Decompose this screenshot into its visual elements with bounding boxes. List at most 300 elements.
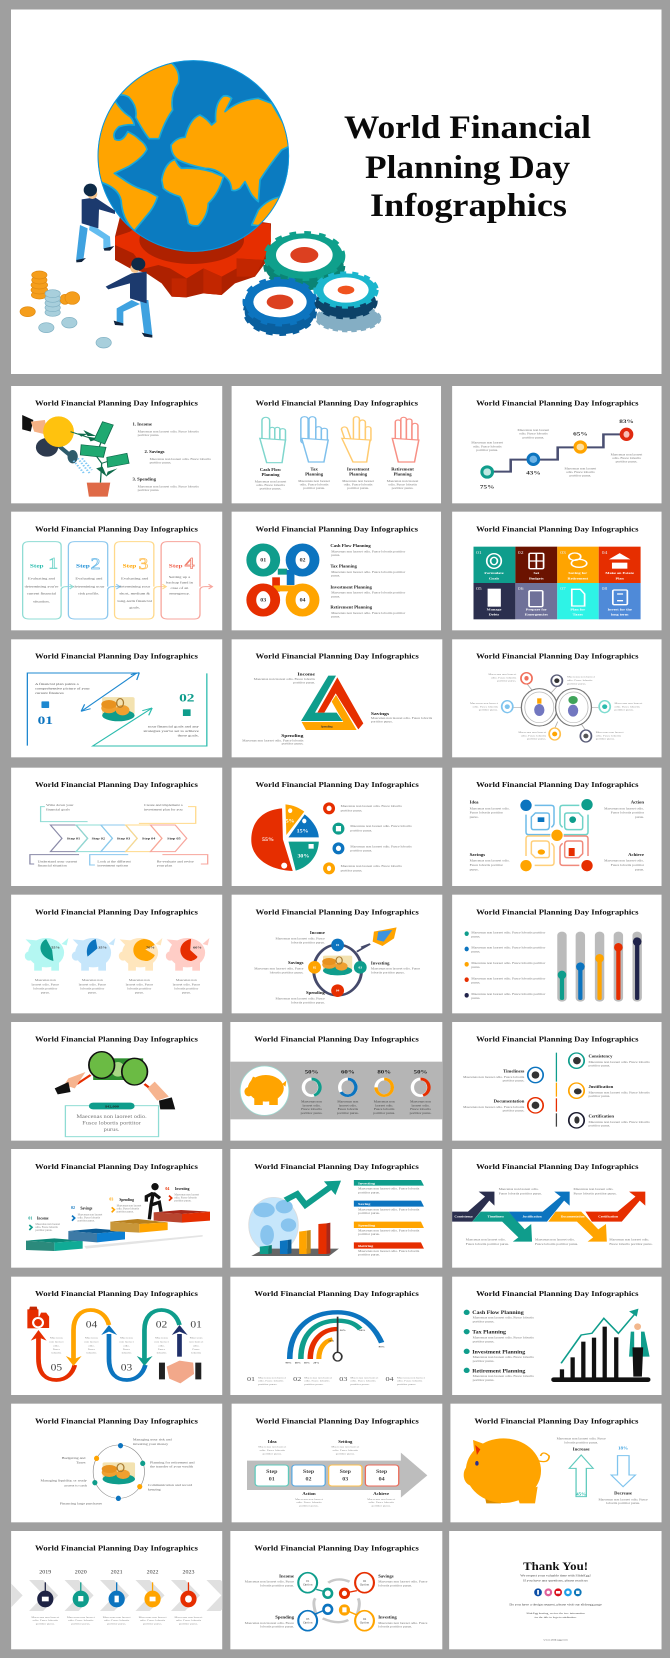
text: step labels: long-term financial bbox=[117, 599, 153, 603]
text: notes: A financial plan paints a bbox=[35, 682, 79, 686]
text: timeline labels: Maecenas non laoreet odio. Fusce lobortis bbox=[588, 1120, 650, 1124]
text: hand labels: Maecenas non laoreet bbox=[298, 479, 330, 483]
text: ring labels: Maecenas non laoreet odio. Fusce bbox=[378, 1580, 428, 1584]
panel: slide 1 watering plant bbox=[11, 386, 222, 503]
diagram: stairs with man and labels: Savings bbox=[80, 1206, 93, 1210]
text: ring notes: Communication and record bbox=[148, 1483, 192, 1487]
text: step labels: Evaluating and bbox=[121, 576, 148, 580]
panel: slide 17 grey band with donuts bbox=[230, 1022, 442, 1141]
text: gauge notes: Maecenas non laoreet bbox=[304, 1376, 332, 1380]
text: hand labels: Cash Flow bbox=[260, 468, 282, 472]
text: curve notes: Maecenas bbox=[50, 1336, 64, 1340]
grid tiles: 01 bbox=[476, 551, 482, 556]
panel: slide 17 grey band with donuts: World Financial Planning Day Infographics bbox=[254, 1035, 419, 1043]
panel: slide 10 chevron steps: World Financial Planning Day Infographics bbox=[35, 780, 198, 789]
text: list: 1. Income bbox=[132, 422, 152, 426]
text: ring notes: Maecenas non laoreet bbox=[596, 730, 624, 734]
text: step labels: Step bbox=[76, 563, 90, 569]
diagram: stairs with man and labels: Maecenas non laoreet bbox=[174, 1192, 199, 1196]
text: chevron labels and notes: Step 04 bbox=[142, 837, 156, 840]
text: increase and decrease: Maecenas non laoreet odio. Fusce bbox=[557, 1437, 606, 1441]
panel: slide 16 magnifying glasses: World Financial Planning Day Infographics bbox=[35, 1035, 198, 1043]
text: piggy notes bbox=[32, 978, 201, 994]
grid tiles: Set bbox=[533, 571, 540, 575]
diagram: curved arrows: 04 bbox=[86, 1321, 97, 1330]
text: arrow notes: Maecenas non laoreet odio. bbox=[499, 1187, 539, 1191]
panel: slide 23 gauge: World Financial Planning Day Infographics bbox=[254, 1289, 419, 1298]
panel: slide 27 big piggy: World Financial Planning Day Infographics bbox=[474, 1416, 639, 1425]
text: slider legend: Maecenas non laoreet odio. Fusce lobortis porttitor bbox=[471, 931, 546, 934]
text: step labels: goals. bbox=[129, 605, 140, 610]
text: donut notes: laoreet odio. bbox=[339, 1104, 357, 1108]
text: arrow notes bbox=[258, 1440, 395, 1507]
diagram: stairs with man and labels: porttitor purus. bbox=[117, 1210, 134, 1214]
text: cycle labels: Savings bbox=[288, 961, 304, 965]
text: triangle labels: Maecenas non laoreet odio. Fusce lobortis bbox=[242, 739, 304, 742]
chart: gauge arcs: 20% bbox=[328, 1340, 335, 1342]
text: quadrant notes: Fusce lobortis porttitor bbox=[611, 863, 645, 867]
ribbon labels: porttitor purus. bbox=[358, 1232, 380, 1236]
text: piggy notes: lobortis porttitor bbox=[80, 987, 105, 990]
panel: slide 5 clover loops: World Financial Planning Day Infographics bbox=[256, 524, 419, 533]
text: step notes bbox=[471, 428, 642, 478]
text: quadrant notes: Maecenas non laoreet odio. bbox=[470, 859, 510, 863]
panel: slide 3 stepped line: World Financial Planning Day Infographics bbox=[476, 398, 639, 407]
text: step labels: 1 bbox=[48, 554, 58, 572]
icon: camera bbox=[27, 1307, 49, 1328]
chart: pie: 55% bbox=[262, 838, 274, 843]
text: planning list: Retirement Planning bbox=[330, 605, 373, 610]
text: triangle labels bbox=[242, 673, 433, 746]
rows 7 to 10 of slide thumbnails bbox=[0, 1149, 662, 1649]
text: triangle labels: porttitor purus. bbox=[371, 720, 393, 724]
text: years and notes: 2019 bbox=[39, 1570, 52, 1575]
text: step labels: 4 bbox=[185, 554, 195, 572]
text: donut notes: Maecenas non bbox=[374, 1100, 395, 1104]
text: chevron labels and notes: Understand your current bbox=[38, 860, 77, 864]
text: quadrant notes: Idea bbox=[470, 800, 480, 804]
text: step notes: Maecenas non laoreet bbox=[611, 453, 642, 456]
text: arrow notes: Fusce lobortis porttitor purus. bbox=[609, 1242, 653, 1246]
text: contact lines: We respect your valuable time with SlideEgg! bbox=[520, 1574, 591, 1578]
text: cycle labels: Investing bbox=[371, 961, 390, 965]
chart: stepped progress line bbox=[480, 419, 634, 490]
text: timeline labels: Maecenas non laoreet odio. Fusce lobortis bbox=[588, 1060, 650, 1064]
text: quadrant notes: Maecenas non laoreet odio. bbox=[604, 807, 644, 810]
heading: hero title: World Financial bbox=[344, 110, 591, 146]
diagram: ring, coins and rocket: 01 bbox=[336, 943, 340, 947]
diagram: four option rings: 02 bbox=[363, 1579, 367, 1583]
text: timeline labels: porttitor purus. bbox=[503, 1079, 525, 1083]
text: ring labels: Investing bbox=[378, 1615, 398, 1620]
diagram: grey arrow with cards: 02 bbox=[306, 1477, 312, 1482]
text: donut notes: Fusce lobortis bbox=[338, 1107, 359, 1111]
legend with circles: porttitor purus. bbox=[341, 869, 363, 872]
chart: gauge arcs: 60% bbox=[295, 1362, 301, 1364]
text: chevron labels and notes: Step 03 bbox=[117, 837, 130, 840]
text: ring notes: Maecenas non laoreet bbox=[615, 701, 643, 705]
callout: text box bbox=[65, 1103, 159, 1137]
text: chevron labels and notes: investment plan for you bbox=[144, 808, 183, 811]
chart: gauge arcs: 60% bbox=[359, 1329, 366, 1332]
diagram: grey arrow with cards: Step bbox=[376, 1470, 387, 1475]
text: quadrant notes: Savings bbox=[470, 853, 485, 857]
panel: slide 21 zigzag arrows bbox=[452, 1149, 662, 1268]
icon: man pushing gear bbox=[106, 258, 152, 338]
text: step notes: porttitor purus. bbox=[476, 448, 498, 452]
text: timeline labels: porttitor purus. bbox=[503, 1109, 525, 1113]
ribbon labels: porttitor purus. bbox=[358, 1253, 380, 1257]
text: years and notes: porttitor purus. bbox=[36, 1622, 55, 1625]
text: quadrant notes: Fusce lobortis porttitor bbox=[470, 811, 504, 815]
text: ring notes: odio. Fusce lobortis bbox=[473, 705, 499, 708]
text: planning list: Maecenas non laoreet odio. Fusce lobortis porttitor bbox=[331, 570, 406, 574]
text: piggy notes: purus. bbox=[88, 991, 97, 994]
icons: four piggy charts: 70% bbox=[146, 946, 155, 950]
text: slider legend: Maecenas non laoreet odio. Fusce lobortis porttitor bbox=[471, 961, 546, 965]
text: hand labels: Planning bbox=[305, 472, 324, 477]
text: list: Maecenas non laoreet odio. Fusce lobortis bbox=[150, 457, 212, 461]
icon: four connected loops: 04 bbox=[300, 598, 306, 603]
text: curve notes bbox=[49, 1336, 204, 1355]
text: step notes: odio. Fusce lobortis bbox=[566, 470, 596, 474]
text: increase and decrease bbox=[557, 1437, 648, 1505]
diagram: curved arrows bbox=[27, 1307, 202, 1383]
text: gauge notes: 03 bbox=[339, 1376, 348, 1383]
panel: slide 7 arrows bbox=[11, 639, 222, 757]
panel: slide 11 pie chart: World Financial Planning Day Infographics bbox=[256, 780, 419, 789]
chevron band bbox=[12, 1580, 222, 1611]
diagram: stairs with man and labels: odio. Fusce lobortis bbox=[78, 1215, 100, 1219]
text: cycle labels: lobortis porttitor purus. bbox=[291, 941, 325, 944]
text: increase and decrease: Increase bbox=[573, 1447, 590, 1452]
diagram: four option rings bbox=[298, 1573, 374, 1631]
text: notes: your financial goals and any bbox=[148, 724, 199, 729]
text: arrow notes: Maecenas non laoreet odio. bbox=[466, 1238, 506, 1242]
text: step labels: Evaluating and bbox=[28, 576, 55, 580]
text: list bbox=[132, 422, 212, 492]
text: years and notes: 2023 bbox=[182, 1570, 195, 1575]
text: step labels: Evaluating and bbox=[75, 576, 102, 580]
text: gauge notes: porttitor purus. bbox=[304, 1382, 324, 1386]
text: arrow notes: odio. Fusce lobortis bbox=[333, 1448, 359, 1452]
legend with circles: Maecenas non laoreet odio. Fusce lobortis bbox=[350, 845, 412, 848]
text: arrow notes bbox=[466, 1187, 653, 1246]
diagram: grey arrow with cards: 03 bbox=[342, 1477, 349, 1482]
chart: stepped progress line: 83% bbox=[619, 419, 634, 425]
diagram: grey arrow with cards: Step bbox=[340, 1470, 351, 1475]
text: timeline labels: Consistency bbox=[588, 1054, 613, 1058]
text: slider legend bbox=[465, 931, 546, 1000]
text: donut notes: Maecenas non bbox=[410, 1100, 431, 1104]
diagram: stairs with man and labels: 01 bbox=[28, 1215, 32, 1220]
text: planning bullets: Maecenas non laoreet odio. Fusce lobortis bbox=[473, 1336, 535, 1339]
panel: slide 19 stairs bbox=[11, 1149, 222, 1268]
grid tiles: Plan bbox=[616, 577, 625, 580]
text: arrow notes: Idea bbox=[268, 1440, 278, 1444]
diagram: curved arrows: 02 bbox=[156, 1321, 167, 1330]
icon: globe bbox=[88, 60, 295, 252]
ribbon labels: porttitor purus. bbox=[358, 1191, 380, 1194]
text: list: porttitor purus. bbox=[138, 488, 160, 492]
chart: pie: 15% bbox=[297, 829, 309, 834]
text: chevron labels and notes: Write down your bbox=[46, 803, 74, 807]
text: piggy notes: lobortis porttitor bbox=[33, 987, 58, 990]
text: quadrant notes: Fusce lobortis porttitor bbox=[611, 811, 645, 815]
panel: slide 12 four quadrants: World Financial Planning Day Infographics bbox=[476, 780, 639, 789]
text: quadrant notes: purus. bbox=[470, 815, 479, 819]
chart: stepped progress line: 75% bbox=[480, 484, 494, 490]
text: ring notes: Maecenas non laoreet bbox=[518, 730, 546, 734]
text: ring notes: Financing large purchases bbox=[60, 1502, 103, 1506]
text: curve notes: odio. bbox=[193, 1344, 200, 1347]
legend with circles: Maecenas non laoreet odio. Fusce lobortis bbox=[350, 824, 412, 828]
diagram: grey arrow with cards: Step bbox=[266, 1470, 277, 1475]
text: years and notes bbox=[31, 1570, 203, 1625]
heading: thank you: Thank You! bbox=[523, 1560, 588, 1573]
diagram: ring, coins and rocket: 02 bbox=[313, 966, 317, 969]
text: years and notes: odio. Fusce lobortis bbox=[33, 1618, 59, 1622]
text: notes: comprehensive picture of your bbox=[35, 686, 91, 690]
panel: slide 29 connected rings bbox=[230, 1531, 442, 1649]
text: quadrant notes: Maecenas non laoreet odio. bbox=[604, 859, 644, 863]
diagram: curved arrows: 01 bbox=[190, 1321, 202, 1330]
text: years and notes: odio. Fusce lobortis bbox=[104, 1618, 130, 1622]
grid tiles: 05 bbox=[476, 587, 482, 592]
diagram: grey arrow with cards: 01 bbox=[269, 1477, 275, 1482]
text: step labels: Step bbox=[169, 563, 183, 569]
text: hand labels: odio. Fusce lobortis bbox=[388, 483, 418, 486]
icon: four connected loops: 01 bbox=[260, 558, 267, 563]
text: hand labels: Maecenas non laoreet bbox=[387, 479, 418, 483]
panel: slide 14 circular cycle: World Financial Planning Day Infographics bbox=[256, 907, 419, 916]
text: ring notes: porttitor purus. bbox=[596, 737, 615, 741]
diagram: stairs with man and labels: porttitor purus. bbox=[78, 1218, 95, 1222]
text: ring notes: odio. Fusce lobortis bbox=[491, 676, 517, 679]
chart: pie bbox=[251, 804, 319, 871]
text: arrow notes: Maecenas non laoreet bbox=[367, 1497, 395, 1501]
text: triangle labels: Income bbox=[297, 673, 316, 677]
text: cycle labels: Income bbox=[310, 931, 325, 935]
text: step labels: short, medium & bbox=[119, 591, 151, 596]
panel: slide 21 zigzag arrows: World Financial Planning Day Infographics bbox=[476, 1162, 639, 1171]
panel: slide 23 gauge bbox=[230, 1277, 442, 1395]
chart: gauge arcs: 20% bbox=[313, 1362, 320, 1364]
ribbon labels: Maecenas non laoreet odio. Fusce lobortis bbox=[358, 1208, 420, 1211]
icon: pig in circle bbox=[240, 1066, 289, 1115]
text: planning bullets: Cash Flow Planning bbox=[472, 1311, 524, 1316]
text: quadrant notes bbox=[470, 800, 645, 871]
text: ring notes: porttitor purus. bbox=[527, 737, 546, 741]
text: timeline labels: Maecenas non laoreet odio. Fusce lobortis bbox=[463, 1105, 525, 1109]
text: arrow notes: Maecenas non laoreet bbox=[331, 1445, 359, 1449]
text: list: porttitor purus. bbox=[138, 433, 160, 437]
ribbon labels bbox=[354, 1180, 424, 1257]
panel: hero cover slide bbox=[11, 10, 662, 374]
text: cycle labels: Maecenas non laoreet odio. Fusce bbox=[371, 967, 421, 971]
panel: slide 29 connected rings: World Financial Planning Day Infographics bbox=[254, 1544, 419, 1552]
text: ring notes: porttitor purus. bbox=[615, 708, 634, 712]
chart: black bars with rising line and man bbox=[551, 1309, 650, 1382]
grid tiles: Manage bbox=[487, 608, 502, 611]
text: notes: those goals. bbox=[178, 733, 199, 738]
ribbon labels: Investing bbox=[358, 1182, 375, 1185]
text: quadrant notes: Achieve bbox=[628, 853, 644, 857]
panel: slide 5 clover loops bbox=[232, 512, 441, 630]
text: arrow notes: Maecenas non laoreet odio. bbox=[535, 1238, 575, 1242]
panel: slide 8 impossible triangle: World Financial Planning Day Infographics bbox=[256, 651, 419, 660]
text: triangle labels: porttitor purus. bbox=[293, 681, 315, 684]
icons: four piggy charts: 55% bbox=[51, 946, 60, 950]
text: step notes: Maecenas non laoreet bbox=[565, 467, 596, 470]
text: piggy notes: Maecenas non bbox=[35, 978, 56, 982]
text: cycle labels: lobortis porttitor purus. bbox=[270, 971, 304, 974]
text: gauge notes: porttitor purus. bbox=[258, 1382, 278, 1386]
text: piggy notes: laoreet odio. Fusce bbox=[126, 983, 154, 986]
icon: coins bbox=[20, 271, 111, 348]
grid tiles: Goals bbox=[489, 577, 500, 580]
text: planning list: purus. bbox=[331, 553, 340, 557]
text: ring labels: Savings bbox=[378, 1574, 394, 1578]
text: ring notes: Planning for retirement and bbox=[150, 1461, 195, 1464]
text: years and notes: 2020 bbox=[75, 1570, 87, 1575]
text: step labels: Step bbox=[123, 563, 137, 569]
icon: man pushing globe bbox=[76, 184, 115, 262]
text: arrow notes: Fusce lobortis porttitor purus. bbox=[574, 1192, 617, 1195]
text: slider legend: Maecenas non laoreet odio. Fusce lobortis porttitor bbox=[471, 946, 546, 950]
text: ring notes bbox=[470, 672, 643, 741]
panel: slide 25 ring of text bbox=[11, 1404, 222, 1522]
text: arrow notes: odio. Fusce lobortis bbox=[296, 1500, 323, 1504]
legend with circles: porttitor purus. bbox=[341, 809, 363, 812]
text: ring labels: lobortis porttitor purus. bbox=[260, 1584, 294, 1587]
panel: slide 4 step boxes bbox=[11, 512, 222, 630]
text: cycle labels bbox=[254, 931, 421, 1004]
text: planning bullets: Maecenas non laoreet odio. Fusce lobortis bbox=[473, 1374, 535, 1378]
text: years and notes: Maecenas non laoreet bbox=[67, 1615, 95, 1619]
text: arrow notes: Setting bbox=[338, 1440, 353, 1444]
text: timeline labels: porttitor purus. bbox=[588, 1064, 610, 1068]
text: planning list bbox=[330, 544, 406, 619]
icon: four connected loops: 02 bbox=[300, 558, 306, 563]
panel: slide 26 arrow with step cards bbox=[232, 1404, 442, 1522]
text: donut notes: Fusce lobortis bbox=[374, 1107, 395, 1111]
text: piggy notes: laoreet odio. Fusce bbox=[79, 983, 107, 986]
text: notes: strategies you've set to achieve bbox=[143, 729, 199, 733]
panel: slide 12 four quadrants bbox=[452, 768, 662, 886]
panel: slide 11 pie chart bbox=[232, 768, 442, 886]
text: triangle labels: Maecenas non laoreet odio. Fusce lobortis bbox=[254, 677, 316, 681]
text: step labels: determining your bbox=[119, 584, 151, 588]
text: step labels: determining your bbox=[73, 584, 105, 588]
legend with circles: Maecenas non laoreet odio. Fusce lobortis bbox=[341, 804, 403, 808]
text: ring notes: porttitor purus. bbox=[567, 682, 587, 685]
text: ring labels: lobortis porttitor purus. bbox=[378, 1584, 412, 1587]
text: curve notes: lobortis bbox=[87, 1351, 97, 1355]
text: ring notes: the transfer of your wealth bbox=[150, 1465, 193, 1469]
text: gauge notes: Maecenas non laoreet bbox=[397, 1376, 425, 1380]
text: years and notes: odio. Fusce lobortis bbox=[140, 1618, 166, 1622]
text: cycle labels: Maecenas non laoreet odio. Fusce bbox=[276, 997, 325, 1001]
chart: pie: 5% bbox=[286, 819, 295, 824]
text: hand labels: Investment bbox=[347, 467, 370, 471]
text: arrow notes: Maecenas non laoreet odio. bbox=[574, 1187, 614, 1191]
panel: slide 14 circular cycle bbox=[232, 895, 442, 1013]
panel: slide 15 vertical sliders: World Financial Planning Day Infographics bbox=[476, 907, 639, 916]
chart: donuts: 60% bbox=[341, 1070, 355, 1075]
text: timeline labels bbox=[463, 1054, 650, 1128]
icons: four piggy charts: 60% bbox=[193, 946, 202, 950]
chart: sliders bbox=[557, 932, 642, 1002]
panel: slide 30 thank you bbox=[449, 1531, 662, 1649]
diagram: stairs with man and labels: 02 bbox=[71, 1205, 75, 1210]
text: piggy notes: lobortis porttitor bbox=[174, 987, 199, 990]
diagram: stairs with man and labels: odio. Fusce lobortis bbox=[35, 1225, 58, 1229]
text: ring notes: odio. Fusce lobortis bbox=[521, 734, 547, 737]
text: arrow notes: Achieve bbox=[373, 1492, 389, 1496]
grey band bbox=[230, 1062, 442, 1119]
text: ring notes: Taxes bbox=[76, 1461, 86, 1465]
text: planning list: Maecenas non laoreet odio. Fusce lobortis porttitor bbox=[331, 550, 406, 553]
text: timeline labels: Documentation bbox=[494, 1099, 525, 1104]
text: curve notes: Maecenas bbox=[85, 1336, 99, 1340]
text: ring labels: Spending bbox=[275, 1615, 295, 1620]
text: planning list: purus. bbox=[331, 574, 340, 578]
text: ring labels: lobortis porttitor purus. bbox=[260, 1625, 294, 1629]
text: planning list: purus. bbox=[331, 615, 340, 619]
text: cycle labels: Maecenas non laoreet odio. Fusce bbox=[276, 937, 325, 940]
text: curve notes: non laoreet bbox=[119, 1340, 134, 1343]
text: curve notes: lobortis bbox=[122, 1351, 132, 1355]
text: notes: current finances bbox=[35, 691, 64, 695]
diagram: curved arrows: 03 bbox=[121, 1364, 132, 1373]
text: arrow notes: porttitor purus. bbox=[263, 1452, 282, 1455]
panel: slide 16 magnifying glasses bbox=[11, 1022, 222, 1141]
diagram: stairs with man and labels bbox=[26, 1183, 210, 1251]
text: donut notes bbox=[301, 1100, 432, 1115]
text: slider legend: purus. bbox=[471, 981, 481, 984]
text: curve notes: non laoreet bbox=[84, 1340, 99, 1343]
text: years and notes: odio. Fusce lobortis bbox=[176, 1618, 202, 1622]
step outlines with arrows bbox=[23, 542, 212, 619]
text: step notes: odio. Fusce lobortis bbox=[612, 456, 642, 460]
text: curve notes: odio. bbox=[88, 1344, 95, 1347]
text: list: 2. Savings bbox=[144, 450, 165, 454]
text: step labels: Setting up a bbox=[169, 575, 190, 579]
text: planning list: Maecenas non laoreet odio. Fusce lobortis porttitor bbox=[331, 591, 406, 595]
panel: slide 27 big piggy bbox=[450, 1404, 662, 1522]
diagram: stairs with man and labels: Spending bbox=[119, 1198, 134, 1202]
text: curve notes: Fusce bbox=[88, 1347, 96, 1351]
text: ring notes: Managing liquidity, or ready bbox=[41, 1479, 87, 1483]
diagram: stairs with man and labels: Income bbox=[37, 1216, 49, 1220]
rows 1 to 3 of slide thumbnails bbox=[11, 386, 662, 757]
text: planning bullets: Maecenas non laoreet odio. Fusce lobortis bbox=[473, 1316, 535, 1320]
text: quadrant notes: purus. bbox=[470, 868, 479, 871]
text: step labels: 2 bbox=[91, 555, 100, 572]
text: chevron labels and notes bbox=[38, 803, 194, 868]
icons: social circles bbox=[534, 1588, 582, 1596]
text: gauge notes: 04 bbox=[385, 1376, 394, 1383]
diagram: stairs with man and labels: Maecenas non laoreet bbox=[78, 1212, 103, 1216]
text: years and notes: porttitor purus. bbox=[143, 1622, 162, 1625]
diagram: stairs with man and labels: Maecenas non laoreet bbox=[117, 1204, 142, 1208]
text: ring notes: odio. Fusce lobortis bbox=[567, 678, 593, 682]
panel: slide 2 hand counting bbox=[232, 386, 441, 503]
text: cycle labels: lobortis porttitor purus. bbox=[371, 971, 405, 974]
text: arrow notes: porttitor purus. bbox=[336, 1452, 355, 1455]
text: curve notes: non laoreet bbox=[189, 1340, 204, 1343]
